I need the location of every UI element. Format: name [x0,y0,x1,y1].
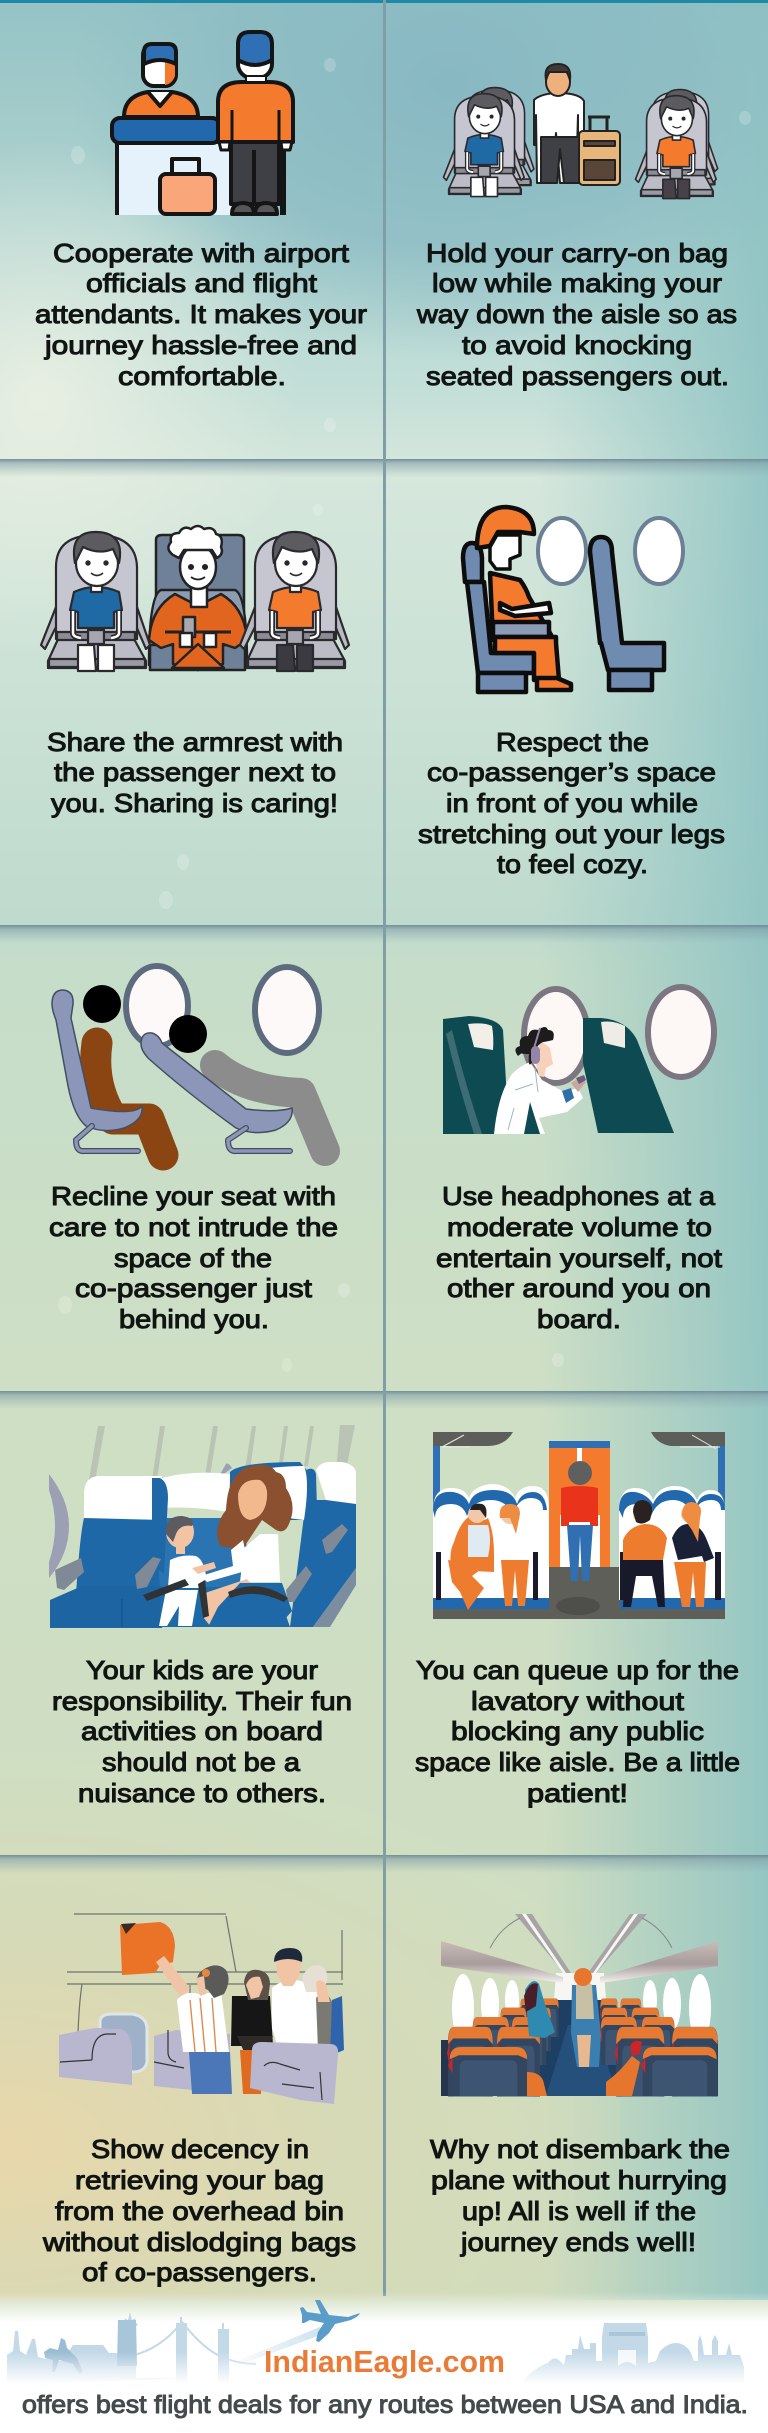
text: low while making your [432,268,722,298]
icon: plane [300,2300,360,2342]
panel: respect leg space [418,507,725,879]
text: of co-passengers. [82,2257,317,2287]
text: space like aisle. Be a little [415,1747,740,1777]
panel: disembark [430,1914,730,2257]
icon: seats and windows with passenger [463,507,683,692]
text: without dislodging bags [42,2227,356,2257]
text: seated passengers out. [426,361,729,391]
text: board. [537,1304,621,1334]
text: Why not disembark the [430,2134,730,2164]
text [436,1181,723,1334]
text [430,2134,730,2257]
panel: kids [49,1425,356,1808]
skyline: India landmarks [522,2323,744,2385]
text: Show decency in [91,2134,309,2164]
text: the passenger next to [54,757,336,787]
text: Hold your carry-on bag [426,238,728,268]
text: Your kids are your [86,1655,318,1685]
plane trail [232,2327,326,2367]
fade [0,2352,768,2396]
text: Use headphones at a [442,1181,716,1211]
text: entertain yourself, not [436,1243,723,1273]
top bar [0,0,768,3]
panel: recline with care [49,966,338,1334]
text: moderate volume to [447,1212,712,1242]
text: stretching out your legs [418,819,725,849]
text: up! All is well if the [462,2196,696,2226]
text: you. Sharing is caring! [51,788,338,818]
text: responsibility. Their fun [52,1686,352,1716]
text: from the overhead bin [55,2196,344,2226]
text: to feel cozy. [497,849,648,879]
text [52,1655,352,1808]
text: journey ends well! [460,2227,696,2257]
row separators [0,459,768,1873]
text [47,727,343,818]
text: journey hassle-free and [44,330,357,360]
footer [0,2292,768,2433]
text [416,238,737,391]
text: patient! [527,1778,628,1808]
text: to avoid knocking [462,330,692,360]
icon: three seated passengers [41,526,349,671]
text: comfortable. [118,361,286,391]
text: way down the aisle so as [416,299,737,329]
icon: aisle passengers and bag [443,64,718,199]
text: co-passenger’s space [427,757,716,787]
text: Respect the [496,727,649,757]
icon: passenger with headphones [443,987,714,1134]
panel: lavatory queue [415,1432,740,1808]
icon: mother and child on seats [49,1425,356,1628]
text [35,238,367,391]
text: blocking any public [451,1716,704,1746]
panel: hold carry-on low [416,64,737,391]
text [415,1655,740,1808]
panel: share the armrest [41,526,349,818]
center divider [383,0,386,2296]
icon: reclined seats [52,966,325,1155]
text: should not be a [102,1747,301,1777]
icon: passengers at overhead bin [59,1914,344,2104]
text: space of the [114,1243,272,1273]
panel: cooperate with officials [35,32,367,391]
text: You can queue up for the [416,1655,739,1685]
icon: airport desk and attendants [112,32,293,215]
text: Share the armrest with [47,727,343,757]
text [42,2134,356,2287]
text: other around you on [447,1273,711,1303]
text: Recline your seat with [51,1181,336,1211]
text [418,727,725,879]
text: co-passenger just [75,1273,313,1303]
logo: IndianEagle.com [264,2344,505,2379]
icon: cabin interior [441,1914,718,2096]
text: in front of you while [446,788,698,818]
text: retrieving your bag [75,2165,324,2195]
text: attendants. It makes your [35,299,367,329]
text: Cooperate with airport [53,238,350,268]
text: behind you. [119,1304,269,1334]
text: nuisance to others. [78,1778,326,1808]
text: activities on board [81,1716,323,1746]
skyline: USA landmarks [7,2312,256,2385]
panel: headphones [436,987,723,1334]
text: lavatory without [471,1686,685,1716]
icon: queue in aisle [433,1432,725,1619]
text: officials and flight [86,268,318,298]
text: plane without hurrying [431,2165,727,2195]
text [49,1181,338,1334]
panel: retrieving bag [42,1914,356,2287]
text: care to not intrude the [49,1212,338,1242]
tagline: offers best flight deals for any routes between USA and India. [22,2391,748,2419]
